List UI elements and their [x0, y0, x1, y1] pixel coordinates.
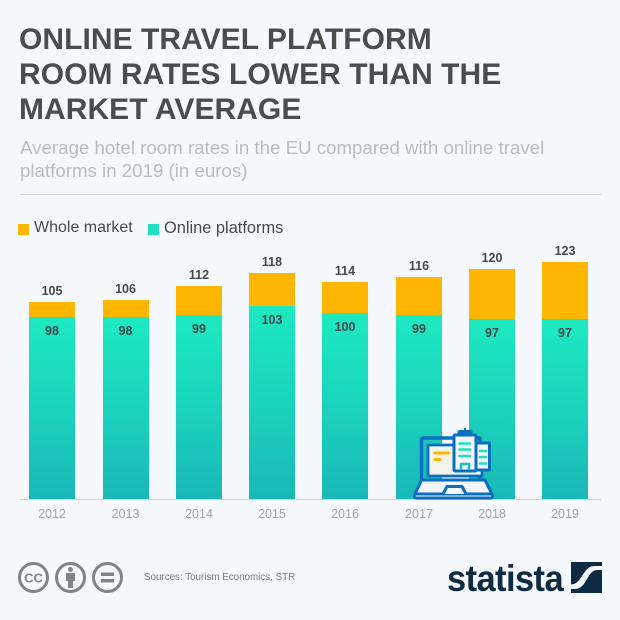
bar 2014	[176, 268, 222, 521]
bar 2012: 98	[45, 324, 59, 338]
bar 2012: 2012	[38, 507, 66, 521]
bar 2019: 123	[555, 244, 575, 258]
bar 2017: 116	[409, 259, 429, 273]
legend swatch: whole market	[18, 224, 29, 235]
bar 2016: 114	[335, 264, 355, 278]
title: ROOM RATES LOWER THAN THE	[19, 58, 501, 91]
bar 2018: 97	[485, 326, 499, 340]
bar 2019: 2019	[551, 507, 579, 521]
bar 2018: 120	[482, 251, 502, 265]
logo mark	[571, 562, 602, 593]
bar 2015: 103	[262, 313, 282, 327]
bar 2013: 98	[119, 324, 132, 338]
bar 2014: 2014	[185, 507, 213, 521]
legend label: online platforms: Online platforms	[164, 219, 283, 237]
legend	[18, 219, 283, 237]
logo wordmark: statista	[447, 558, 563, 599]
bar 2016: 100	[335, 320, 355, 334]
bar 2019: 97	[558, 326, 572, 340]
title: ONLINE TRAVEL PLATFORM	[19, 23, 432, 56]
bar 2017: 99	[412, 322, 426, 336]
bar 2018: 2018	[478, 507, 506, 521]
subtitle: platforms in 2019 (in euros)	[20, 160, 247, 180]
icon: laptop with hotel	[412, 428, 494, 500]
bar chart	[20, 244, 601, 521]
title	[19, 23, 501, 126]
icon: no derivatives	[94, 564, 122, 592]
title: MARKET AVERAGE	[19, 93, 301, 126]
bar 2016: 2016	[331, 507, 359, 521]
legend label: whole market: Whole market	[34, 219, 133, 236]
bar 2012	[29, 284, 75, 521]
bar 2013	[103, 282, 149, 521]
statista logo	[447, 558, 602, 599]
bar 2013: 106	[115, 282, 136, 296]
bar 2012: 105	[42, 284, 62, 298]
bar 2014: 99	[192, 322, 206, 336]
bar 2013: 2013	[112, 507, 139, 521]
bar 2017	[396, 259, 442, 521]
subtitle: Average hotel room rates in the EU compared with online travel	[20, 137, 544, 158]
bar 2016	[322, 264, 368, 521]
bar 2019	[542, 244, 588, 521]
license icons	[18, 562, 123, 593]
bar 2015	[249, 255, 295, 521]
bar 2015: 118	[262, 255, 282, 269]
icon: attribution	[56, 564, 84, 592]
bar 2018	[469, 251, 515, 521]
subtitle	[20, 137, 544, 181]
bar 2014: 112	[189, 268, 209, 282]
source text: Sources: Tourism Economics, STR	[144, 572, 295, 583]
legend swatch: online platforms	[148, 224, 159, 235]
icon: cc: CC	[24, 570, 43, 586]
bar 2015: 2015	[258, 507, 286, 521]
bar 2017: 2017	[405, 507, 433, 521]
